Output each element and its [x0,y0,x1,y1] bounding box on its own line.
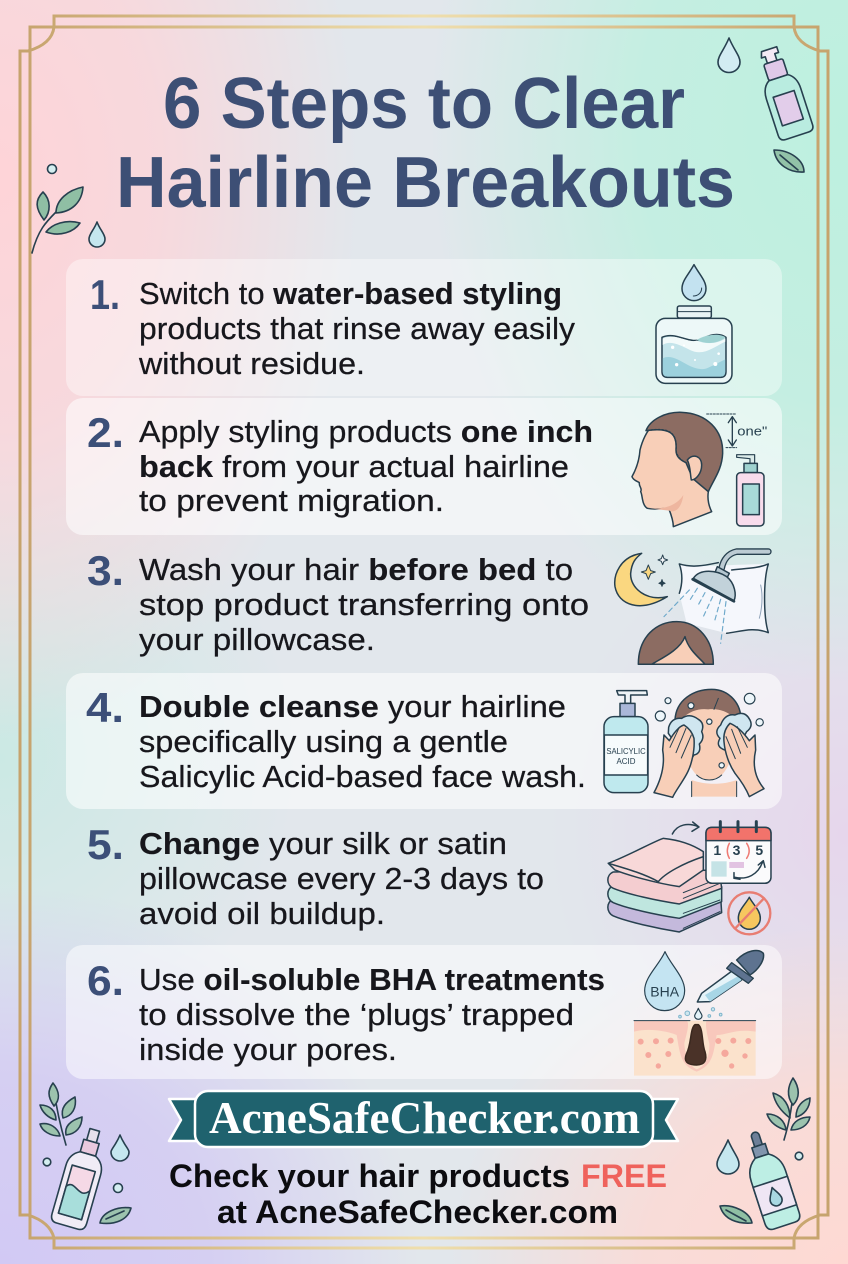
step 5 text: pillowcase every 2-3 days to [139,861,544,896]
step 5 text: avoid oil buildup. [139,896,385,931]
title [116,64,735,223]
step 4 text [139,689,586,794]
title: Hairline Breakouts [116,143,735,223]
icon: BHA drop, dropper and pore [634,951,764,1076]
step 4 number: 4. [86,684,124,731]
icon: water-based jar [656,265,732,383]
icon: bottom right dropper bottle [737,1127,802,1231]
icon: bottom right sprig [767,1078,810,1140]
card 4 [66,673,782,809]
icon: salicylic acid bottle: SALICYLIC [606,747,646,756]
icon: bottom left leaf [100,1208,131,1223]
step 6 text [139,962,605,1067]
icon: top left sprig [32,187,83,253]
step 3 text: stop product transferring onto [139,587,589,622]
icon: head with hairline and bottle: one" [737,425,767,439]
step 6 text: Use oil-soluble BHA treatments [139,962,605,997]
icon: top right bottle [752,44,814,141]
step 2 text: Apply styling products one inch [139,414,593,449]
step 5 text [139,826,544,931]
step 3 [87,547,589,657]
icon: top right drop [718,38,740,72]
step 2 text: to prevent migration. [139,483,444,518]
icon: moon, pillow, shower and head [615,552,768,664]
icon: face washing with foam [654,689,764,797]
icon: salicylic acid bottle [604,691,648,793]
step 1 text [138,276,576,381]
step 4 text: specifically using a gentle [139,724,508,759]
card 1 [66,259,782,396]
step 5 text: Change your silk or satin [139,826,507,861]
step 5 [87,821,544,931]
step 3 text: Wash your hair before bed to [139,552,573,587]
call to action: FREE [581,1158,667,1194]
icon: bottom right bubble [795,1152,803,1160]
icon: BHA drop, dropper and pore: BHA [650,984,680,1000]
step 1 text: products that rinse away easily [139,311,576,346]
icon: top left drop [89,222,105,247]
step 3 number: 3. [87,547,124,594]
icon: small bubble left [48,164,56,174]
step 4 text: Double cleanse your hairline [139,689,566,724]
icon: bottom right drop [717,1140,739,1174]
icon: pillowcases, calendar and no-oil sign: 3 [733,842,741,858]
icon: pillowcases, calendar and no-oil sign: 5 [755,842,763,858]
icon: pillowcases, calendar and no-oil sign: 1 [713,842,721,858]
call to action: at AcneSafeChecker.com [217,1194,618,1230]
step 4 text: Salicylic Acid-based face wash. [139,759,586,794]
step 3 text: your pillowcase. [139,622,375,657]
icon: bottom left sprig [40,1083,82,1145]
step 6 number: 6. [87,957,124,1004]
step 1 text: without residue. [138,346,365,381]
step 5 number: 5. [87,821,124,868]
website banner: AcneSafeChecker.com [209,1092,640,1143]
step 1 number: 1. [90,271,120,318]
icon: top right leaf [774,150,804,172]
step 1 text: Switch to water-based styling [139,276,562,311]
icon: pillowcases, calendar and no-oil sign [608,822,771,934]
card 2 [66,398,782,535]
icon: head with hairline and bottle [632,412,767,527]
step 6 text: inside your pores. [139,1032,397,1067]
step 3 text [139,552,589,657]
step 2 text [139,414,593,518]
step 2 text: back from your actual hairline [139,449,569,484]
icon: bottom left drop [111,1135,129,1161]
icon: bottom left bubbles [43,1158,123,1192]
call to action: Check your hair products [169,1158,570,1194]
step 2 number: 2. [87,409,124,456]
icon: bottom right leaf [720,1206,752,1223]
icon: bottom left spray bottle [50,1125,112,1231]
step 6 text: to dissolve the ‘plugs’ trapped [139,997,574,1032]
title: 6 Steps to Clear [163,64,685,144]
icon: salicylic acid bottle: ACID [616,757,636,766]
card 6 [66,945,782,1079]
call to action [169,1158,667,1230]
